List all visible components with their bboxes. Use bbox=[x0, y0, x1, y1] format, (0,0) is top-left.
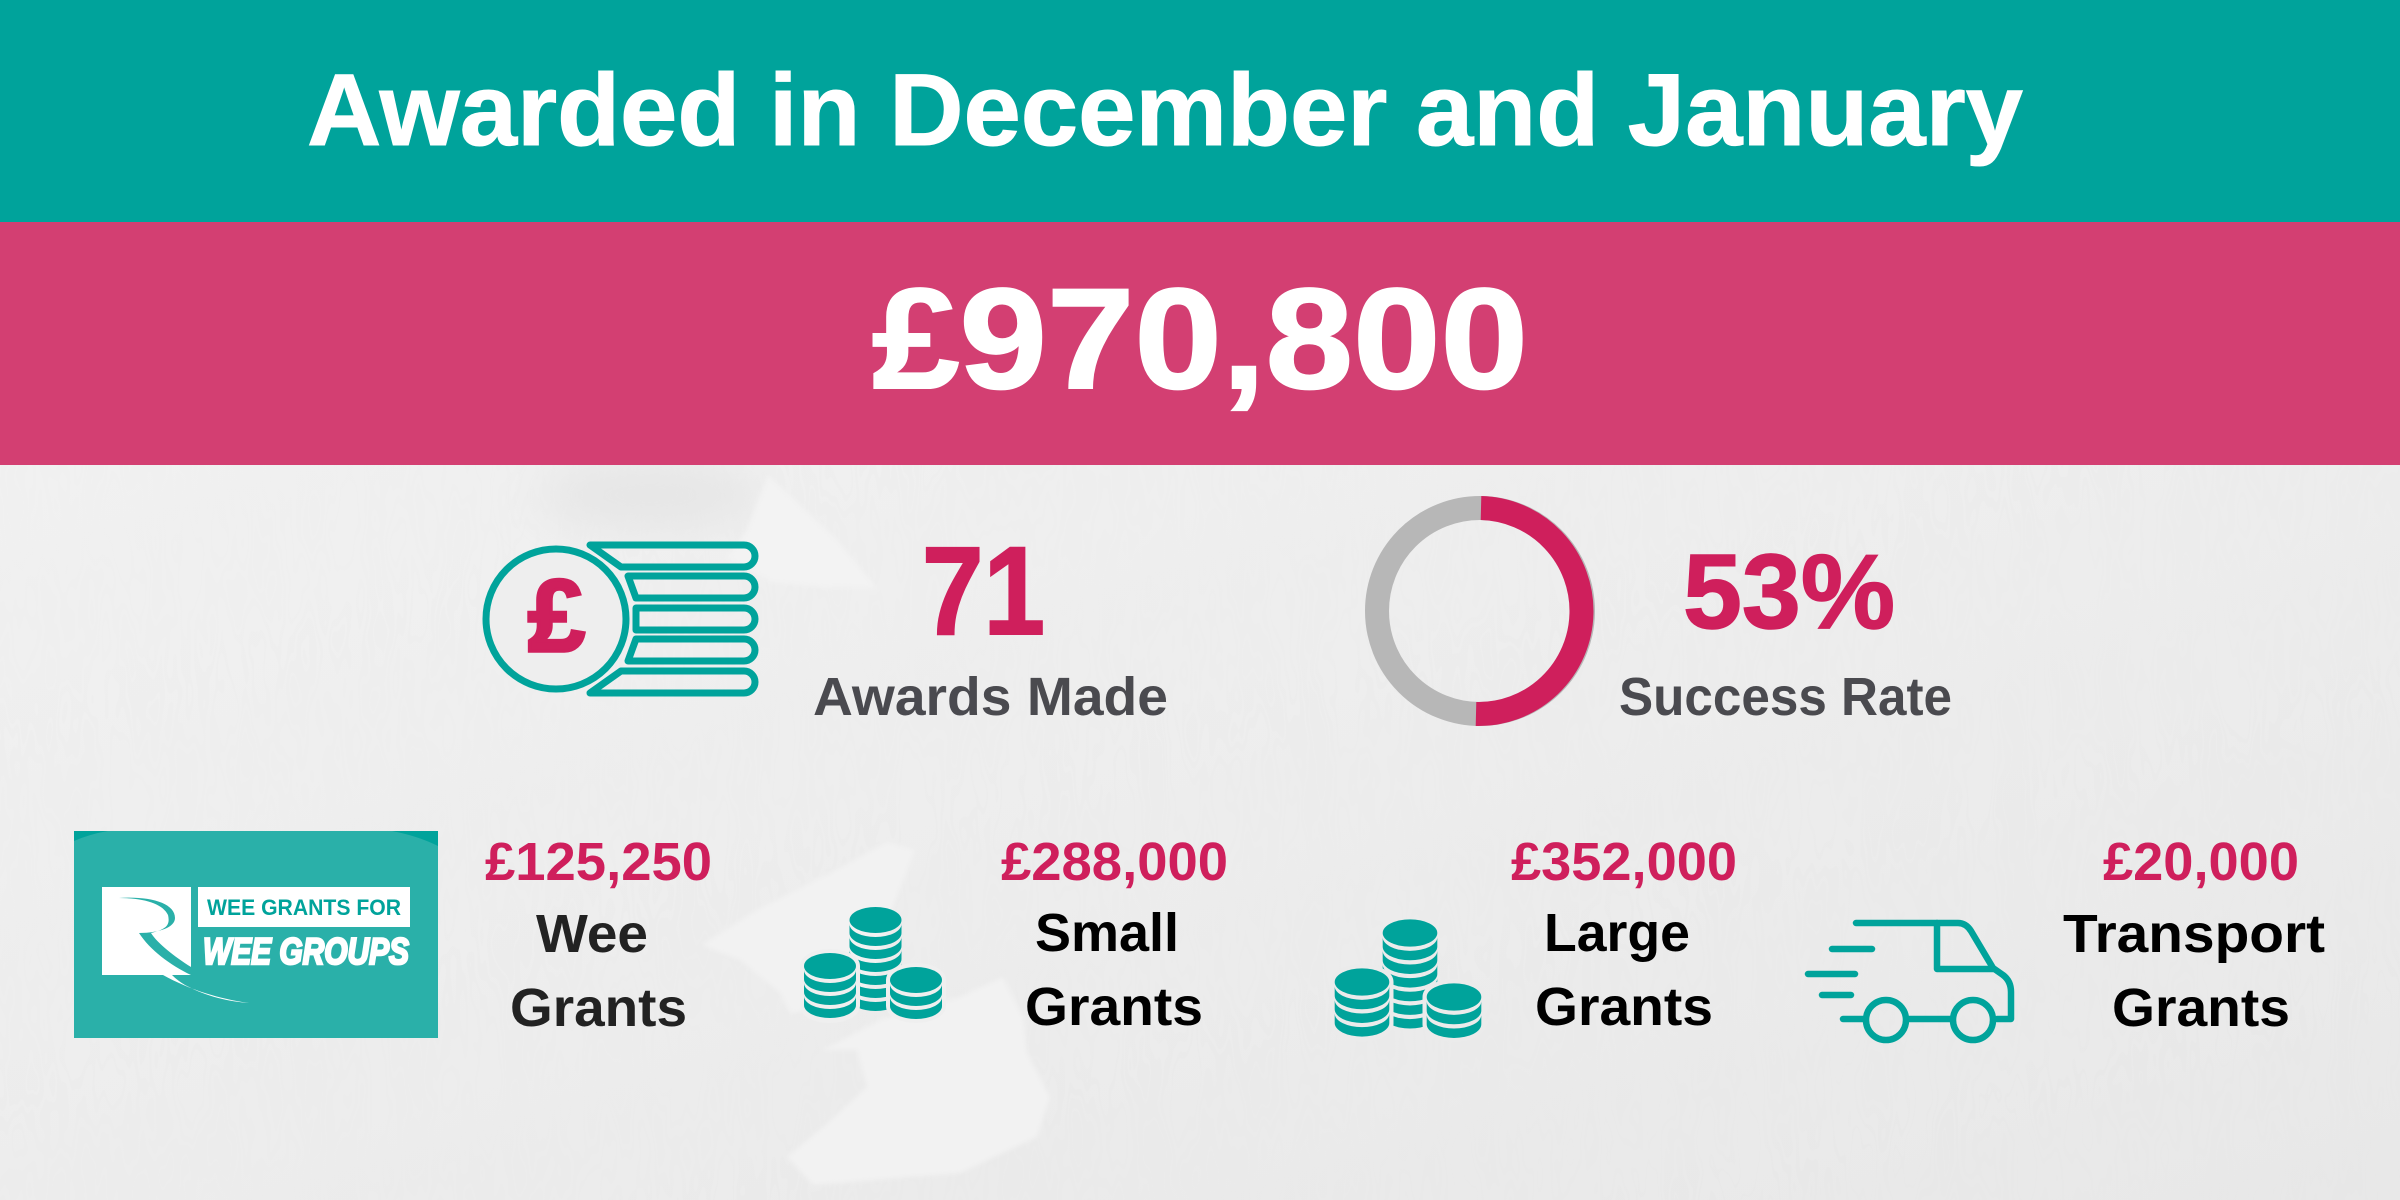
total amount: £970,800 bbox=[872, 260, 1528, 419]
stat: awards made bbox=[813, 522, 1168, 727]
transport grants label: Grants bbox=[2112, 978, 2290, 1038]
large grants label: Grants bbox=[1535, 977, 1713, 1037]
large grants label: £352,000 bbox=[1511, 832, 1737, 892]
transport grants label bbox=[2063, 832, 2325, 1038]
stat: success rate: 53% bbox=[1683, 533, 1895, 651]
small grants label: Grants bbox=[1025, 977, 1203, 1037]
header band: teal bbox=[0, 0, 2400, 222]
large grants label bbox=[1511, 832, 1737, 1037]
logo: wee grants for wee groups bbox=[74, 831, 438, 1038]
small grants label: Small bbox=[1035, 903, 1179, 963]
title: Awarded in December and January bbox=[307, 53, 2023, 167]
logo: wee grants for wee groups: WEE GROUPS bbox=[203, 931, 409, 972]
icon: large coin stacks bbox=[1335, 919, 1481, 1038]
large grants label: Large bbox=[1544, 903, 1690, 963]
wee grants label: £125,250 bbox=[485, 832, 712, 892]
wee grants label: Wee bbox=[536, 904, 648, 964]
transport grants label: Transport bbox=[2063, 904, 2325, 964]
icon: small coin stacks bbox=[804, 907, 942, 1019]
stat: awards made: Awards Made bbox=[813, 667, 1168, 727]
stat: awards made: 71 bbox=[922, 522, 1045, 661]
logo: wee grants for wee groups: WEE GRANTS FOR bbox=[207, 895, 401, 920]
transport grants label: £20,000 bbox=[2103, 832, 2299, 892]
icon: pound coin stack bbox=[486, 545, 755, 693]
small grants label: £288,000 bbox=[1001, 832, 1228, 892]
wee grants label bbox=[485, 832, 712, 1038]
icon: delivery van bbox=[1808, 923, 2011, 1040]
stat: success rate bbox=[1619, 533, 1952, 727]
icon: pound coin stack: £ bbox=[528, 559, 585, 673]
total band: pink bbox=[0, 222, 2400, 465]
wee grants label: Grants bbox=[510, 978, 687, 1038]
small grants label bbox=[1001, 832, 1228, 1037]
stat: success rate: Success Rate bbox=[1619, 667, 1952, 727]
paper background bbox=[0, 460, 2400, 1200]
donut chart: 53 percent bbox=[1377, 508, 1583, 714]
